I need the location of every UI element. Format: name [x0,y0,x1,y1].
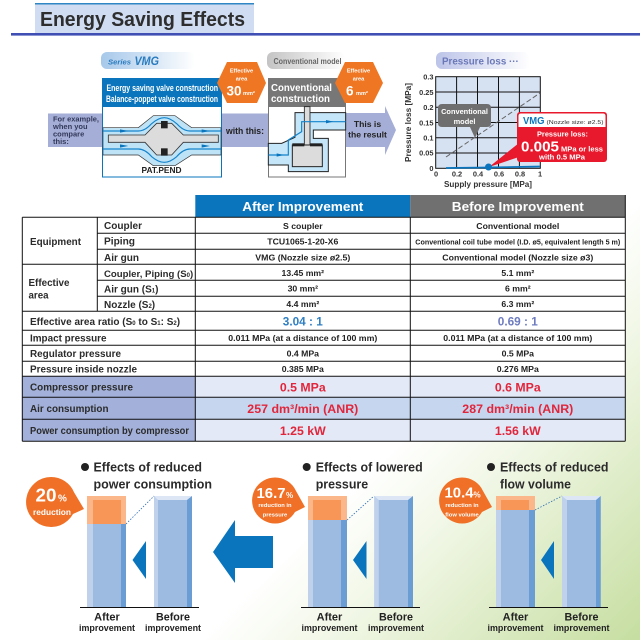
pressure loss pill [436,52,530,69]
row labels: Pressure inside nozzle [30,364,137,376]
callout: 16.7% reduction in pressure: reduction in [258,503,292,509]
row labels: Air gun [104,253,139,264]
after improvement values: 4.4 mm² [286,299,319,309]
axis labels: After [503,612,529,624]
y axis labels: 0 [429,164,434,173]
row labels: Coupler [104,221,142,232]
header: before improvement [410,195,625,217]
row labels: Compressor pressure [30,382,133,394]
badge: effective area 6 mm2: 6 [346,84,354,98]
result arrow: This is [354,119,381,129]
callout: conventional model [438,104,491,138]
after improvement values: 13.45 mm² [282,268,324,278]
row labels: Effective area ratio (S0 to S1: S2) [30,317,180,328]
highlighted results: 257 dm³/min (ANR) [247,402,358,416]
bar: before improvement [562,496,601,607]
callout: 20% reduction: % [58,494,67,504]
y axis labels: 0.05 [419,148,434,158]
y axis labels: 0.2 [423,103,434,112]
axis labels [79,612,201,633]
callout: VMG pressure loss: 0.005 [521,140,559,156]
axis labels: Before [156,612,190,624]
row labels: Nozzle (S2) [104,300,155,311]
pressure loss pill: Pressure loss ··· [442,56,519,68]
after improvement values: S coupler [283,221,323,231]
after improvement values: TCU1065-1-20-X6 [267,236,338,246]
panel: VMG valve construction [102,78,222,177]
before improvement values: 6.3 mm² [501,299,534,309]
result arrow [345,106,396,155]
panel: conventional construction: construction [271,93,330,105]
heading: flow volume [500,478,571,492]
comparison band: for example: For example, [53,114,99,124]
axis labels: After [94,612,121,624]
heading [303,460,423,492]
panel: VMG valve construction: Balance-poppet valve construction [106,94,218,104]
line chart: pressure loss [404,72,542,189]
after improvement values: VMG (Nozzle size ø2.5) [255,252,350,262]
badge: effective area 30 mm2: 30 [226,84,242,98]
x axis labels: 0.2 [452,170,462,178]
callout: VMG pressure loss [485,112,607,170]
row labels [28,221,193,437]
y axis labels: 0.1 [423,134,434,142]
series VMG pill: Series [108,58,131,66]
callout: 10.4% reduction in flow volume: flow volume [445,512,480,518]
y axis labels [419,72,434,173]
before improvement values: 0.5 MPa [502,348,534,358]
y axis labels: 0.3 [423,72,434,82]
heading [81,460,212,492]
row labels: Power consumption by compressor [30,426,189,437]
row labels: area [28,290,49,302]
bar: before improvement [374,496,413,607]
before improvement values: Conventional coil tube model (I.D. ø5, equivalent length 5 m) [415,238,621,246]
callout: 16.7% reduction in pressure: % [286,491,293,500]
callout: 20% reduction [26,477,84,527]
row labels: Effective [28,278,70,289]
axis labels [488,612,610,633]
comparison band: for example [48,114,103,147]
row labels: Air gun (S1) [104,284,158,296]
after improvement values [228,221,377,374]
comparison band: with this: with this: [225,126,264,136]
panel: effects of lowered pressure [252,460,424,633]
panel: VMG valve construction: Energy saving valve construction [106,82,218,93]
y axis title: Pressure loss [MPa] [404,83,413,162]
callout: VMG pressure loss: Pressure loss: [537,130,588,138]
large arrow between panels [213,520,273,583]
callout: VMG pressure loss: VMG [523,116,545,127]
row labels: Impact pressure [30,334,107,344]
before improvement values: 6 mm² [505,284,531,294]
highlighted results: 0.6 MPa [495,380,541,394]
x axis labels: 0.6 [494,170,504,178]
after improvement values: 30 mm² [288,284,318,294]
bar: after improvement [308,496,347,607]
x axis labels: 0 [434,170,438,178]
axis labels: Before [379,612,413,624]
badge: effective area 6 mm2: mm² [356,90,368,97]
badge: effective area 6 mm2: area [353,76,365,82]
result arrow: the result [348,130,387,140]
conventional model pill: Conventional model [274,56,342,66]
badge: effective area 6 mm2 [335,62,383,103]
highlighted results [247,380,573,438]
x axis labels: 0.4 [473,170,484,178]
table: improvement comparison [22,195,625,441]
icon: conventional valve cross-section [268,107,346,172]
y axis labels: 0.15 [419,118,434,128]
panel: conventional construction: Conventional [271,82,332,94]
y axis labels: 0.25 [419,88,434,97]
before improvement values [415,221,621,374]
axis labels: improvement [302,623,358,633]
after improvement values: 0.385 MPa [282,364,324,374]
conventional model pill [267,52,345,69]
callout: 16.7% reduction in pressure [252,477,305,523]
axis labels: Before [564,612,598,624]
badge: effective area 30 mm2: mm² [243,90,255,97]
row labels: Regulator pressure [30,349,121,360]
comparison band: with this [221,114,269,147]
callout: 16.7% reduction in pressure: pressure [263,512,288,518]
x axis labels: 0.8 [515,170,525,178]
badge: effective area 30 mm2: area [236,76,248,82]
heading: pressure [316,478,368,492]
axis labels: improvement [488,623,544,633]
x axis title: Supply pressure [MPa] [444,180,532,189]
after improvement values: 0.011 MPa (at a distance of 100 mm) [228,333,377,343]
axis labels: improvement [554,623,610,633]
comparison band: for example: this: [53,137,69,146]
title: Energy Saving Effects [40,8,245,31]
panel: VMG valve construction: PAT.PEND [142,165,182,175]
panel: effects of reduced flow volume [439,460,610,633]
before improvement values: 0.276 MPa [497,364,539,374]
badge: effective area 6 mm2: Effective [347,68,370,74]
after improvement values: 0.4 MPa [287,348,319,358]
callout: conventional model: Conventional [441,107,488,116]
badge: effective area 30 mm2 [217,62,266,103]
callout: 20% reduction: 20 [36,486,56,506]
axis labels: improvement [368,623,424,633]
heading [487,460,608,492]
heading: Effects of lowered [316,460,423,474]
x axis labels: 1 [538,170,542,178]
badge: effective area 30 mm2: Effective [230,68,253,74]
highlighted results: 0.5 MPa [280,380,326,394]
icon: balance-poppet valve cross-section [103,116,221,166]
title [11,3,640,36]
x axis labels [434,170,542,178]
axis labels: After [317,612,343,624]
heading: power consumption [94,478,212,492]
axis labels: improvement [79,623,135,633]
highlighted results: 1.56 kW [495,424,541,438]
callout: VMG pressure loss: MPa or less [561,144,603,154]
header: after improvement: After Improvement [242,199,364,214]
panel: effects of reduced power consumption [26,460,212,633]
bar: after improvement [496,496,535,607]
row labels: Equipment [30,237,82,248]
before improvement values: Conventional model [476,221,559,231]
callout: 16.7% reduction in pressure: 16.7 [256,486,286,502]
before improvement values: 0.011 MPa (at a distance of 100 mm) [443,333,592,343]
callout: 10.4% reduction in flow volume: 10.4 [444,486,474,502]
callout: 10.4% reduction in flow volume [439,477,492,523]
bar: after improvement [87,496,126,607]
row labels: Air consumption [30,404,108,415]
highlighted results: 287 dm³/min (ANR) [462,402,573,416]
effective area ratios: 3.04 : 1 [283,314,323,328]
heading: Effects of reduced [94,460,202,474]
callout: 10.4% reduction in flow volume: % [474,490,481,500]
callout: 20% reduction: reduction [33,507,71,517]
series VMG pill [101,52,195,69]
series VMG pill: VMG [134,56,159,68]
before improvement values: 5.1 mm² [501,268,534,278]
panel: conventional construction [268,78,346,177]
axis labels: improvement [145,623,201,633]
row labels: Coupler, Piping (S0) [104,269,193,280]
axis labels [302,612,424,633]
highlighted results: 1.25 kW [280,424,326,438]
callout: VMG pressure loss: with 0.5 MPa [538,152,586,162]
callout: VMG pressure loss: (Nozzle size: ø2.5) [546,120,604,126]
before improvement values: Conventional model (Nozzle size ø3) [442,252,593,262]
row labels: Piping [104,236,135,248]
heading: Effects of reduced [500,460,608,474]
header: after improvement [195,195,410,217]
callout: conventional model: model [454,117,475,126]
header: before improvement: Before Improvement [452,199,584,214]
comparison band: for example: compare [53,130,84,138]
effective area ratios [283,314,538,328]
bar: before improvement [154,496,192,607]
callout: 10.4% reduction in flow volume: reduction in [445,503,479,509]
comparison band: for example: when you [52,122,88,131]
effective area ratios: 0.69 : 1 [498,314,538,328]
